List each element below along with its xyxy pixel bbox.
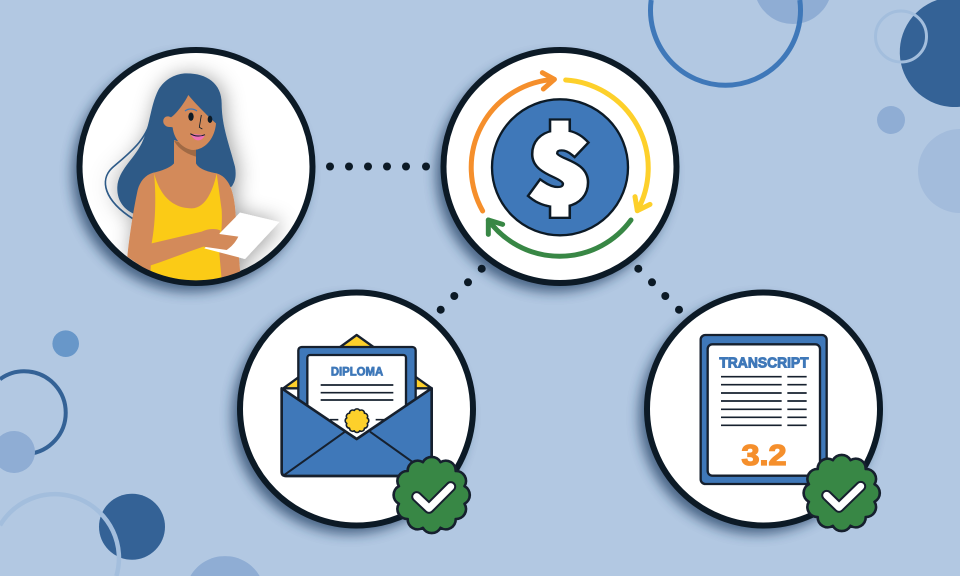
connector dots [326, 162, 683, 314]
icon: diploma check badge [394, 457, 470, 533]
face [163, 95, 216, 150]
circle shadows [72, 56, 875, 534]
mouth [191, 134, 205, 140]
paper [204, 213, 279, 259]
body [127, 140, 242, 283]
dollar sign: $ [529, 95, 591, 230]
envelope front [282, 388, 432, 476]
panel: woman holding paper [80, 50, 312, 283]
green arrow [488, 220, 631, 256]
yellow top [150, 173, 222, 283]
coin [492, 99, 628, 235]
background circles bottom left [0, 330, 260, 576]
diploma lines [321, 385, 393, 420]
nose [199, 115, 202, 129]
transcript paper [708, 344, 820, 476]
hair strand [104, 126, 148, 220]
panel: money cycle [444, 50, 676, 283]
diploma paper [307, 355, 406, 442]
grade: 3.2 [741, 440, 786, 472]
transcript title: TRANSCRIPT [719, 354, 809, 371]
eyes [188, 112, 194, 121]
seal [345, 409, 369, 432]
forearm and hand [127, 229, 238, 267]
panel: diploma envelope [240, 292, 473, 526]
icon: transcript check badge [804, 455, 880, 531]
diploma title: DIPLOMA [331, 365, 383, 379]
hair [117, 73, 236, 215]
transcript frame [701, 335, 827, 484]
panel: transcript [647, 292, 880, 526]
transcript lines [721, 377, 807, 425]
dollar sign: $ [529, 95, 591, 230]
diploma frame [298, 347, 416, 434]
yellow arrow [566, 80, 650, 211]
neck shadow [174, 141, 196, 157]
background circles top right [650, 0, 960, 213]
orange arrow [471, 73, 554, 211]
envelope back flap [283, 335, 432, 388]
eyebrow [185, 109, 197, 111]
